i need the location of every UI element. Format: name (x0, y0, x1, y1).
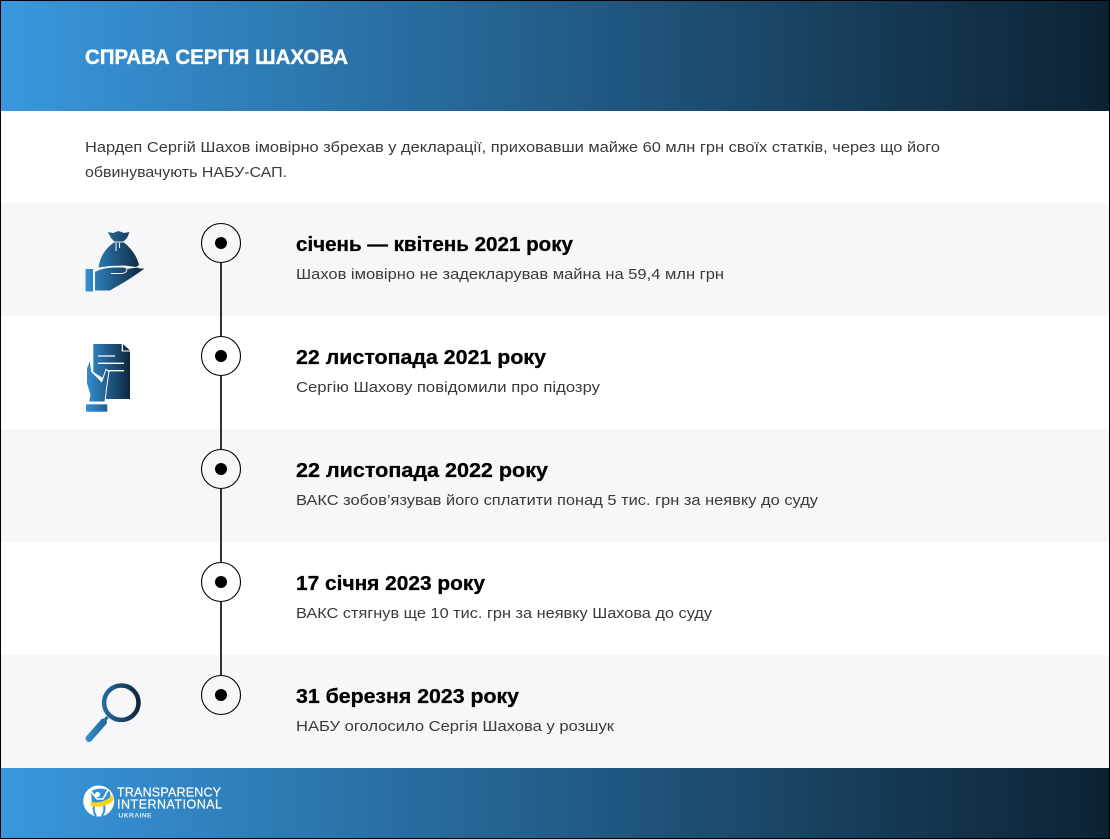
intro text (85, 139, 940, 181)
logo: Transparency International Ukraine (83, 786, 222, 820)
header band (0, 0, 1110, 111)
timeline (202, 224, 240, 714)
logo: Transparency International Ukraine: UKRAINE (118, 812, 152, 820)
event: 22 November 2021: Сергію Шахову повідомили про підозру (296, 379, 601, 396)
event: January–April 2021: Шахов імовірно не задекларував майна на 59,4 млн грн (296, 266, 724, 283)
logo: Transparency International Ukraine: INTERNATIONAL (117, 797, 222, 811)
icon: magnifying glass (89, 686, 138, 738)
row background: 31 March 2023 (0, 655, 1110, 768)
title: СПРАВА СЕРГІЯ ШАХОВА (85, 45, 348, 69)
event: January–April 2021 (296, 233, 724, 283)
event: 31 March 2023 (296, 685, 614, 735)
event: 22 November 2021: 22 листопада 2021 року (296, 346, 547, 369)
event: 22 November 2021 (296, 346, 601, 396)
icon: money bag on hand (86, 231, 144, 292)
event: 31 March 2023: НАБУ оголосило Сергія Шахова у розшук (296, 718, 614, 735)
timeline marker 4 (202, 562, 240, 602)
event: 22 November 2022 (296, 459, 819, 509)
event: 17 January 2023: 17 січня 2023 року (296, 572, 486, 595)
event: 17 January 2023: ВАКС стягнув ще 10 тис. грн за неявку Шахова до суду (296, 605, 713, 622)
intro text: Нардеп Сергій Шахов імовірно збрехав у декларації, приховавши майже 60 млн грн своїх статків, через що його (85, 139, 940, 156)
timeline marker 5 (202, 676, 240, 714)
icon: hand holding document (86, 344, 130, 412)
event: 17 January 2023 (296, 572, 713, 622)
footer band (0, 768, 1110, 839)
event: 22 November 2022: ВАКС зобов’язував його сплатити понад 5 тис. грн за неявку до суду (296, 492, 819, 509)
event: 22 November 2022: 22 листопада 2022 року (296, 459, 549, 482)
row background: January–April 2021 (0, 203, 1110, 316)
timeline marker 3 (202, 450, 240, 488)
row background: 22 November 2022 (0, 429, 1110, 542)
timeline marker 2 (202, 336, 240, 376)
event: 31 March 2023: 31 березня 2023 року (296, 685, 520, 708)
timeline marker 1 (202, 224, 240, 262)
intro text: обвинувачують НАБУ-САП. (85, 164, 287, 181)
logo: Transparency International Ukraine: TRANSPARENCY (117, 786, 222, 800)
event: January–April 2021: січень — квітень 2021 року (296, 233, 574, 256)
